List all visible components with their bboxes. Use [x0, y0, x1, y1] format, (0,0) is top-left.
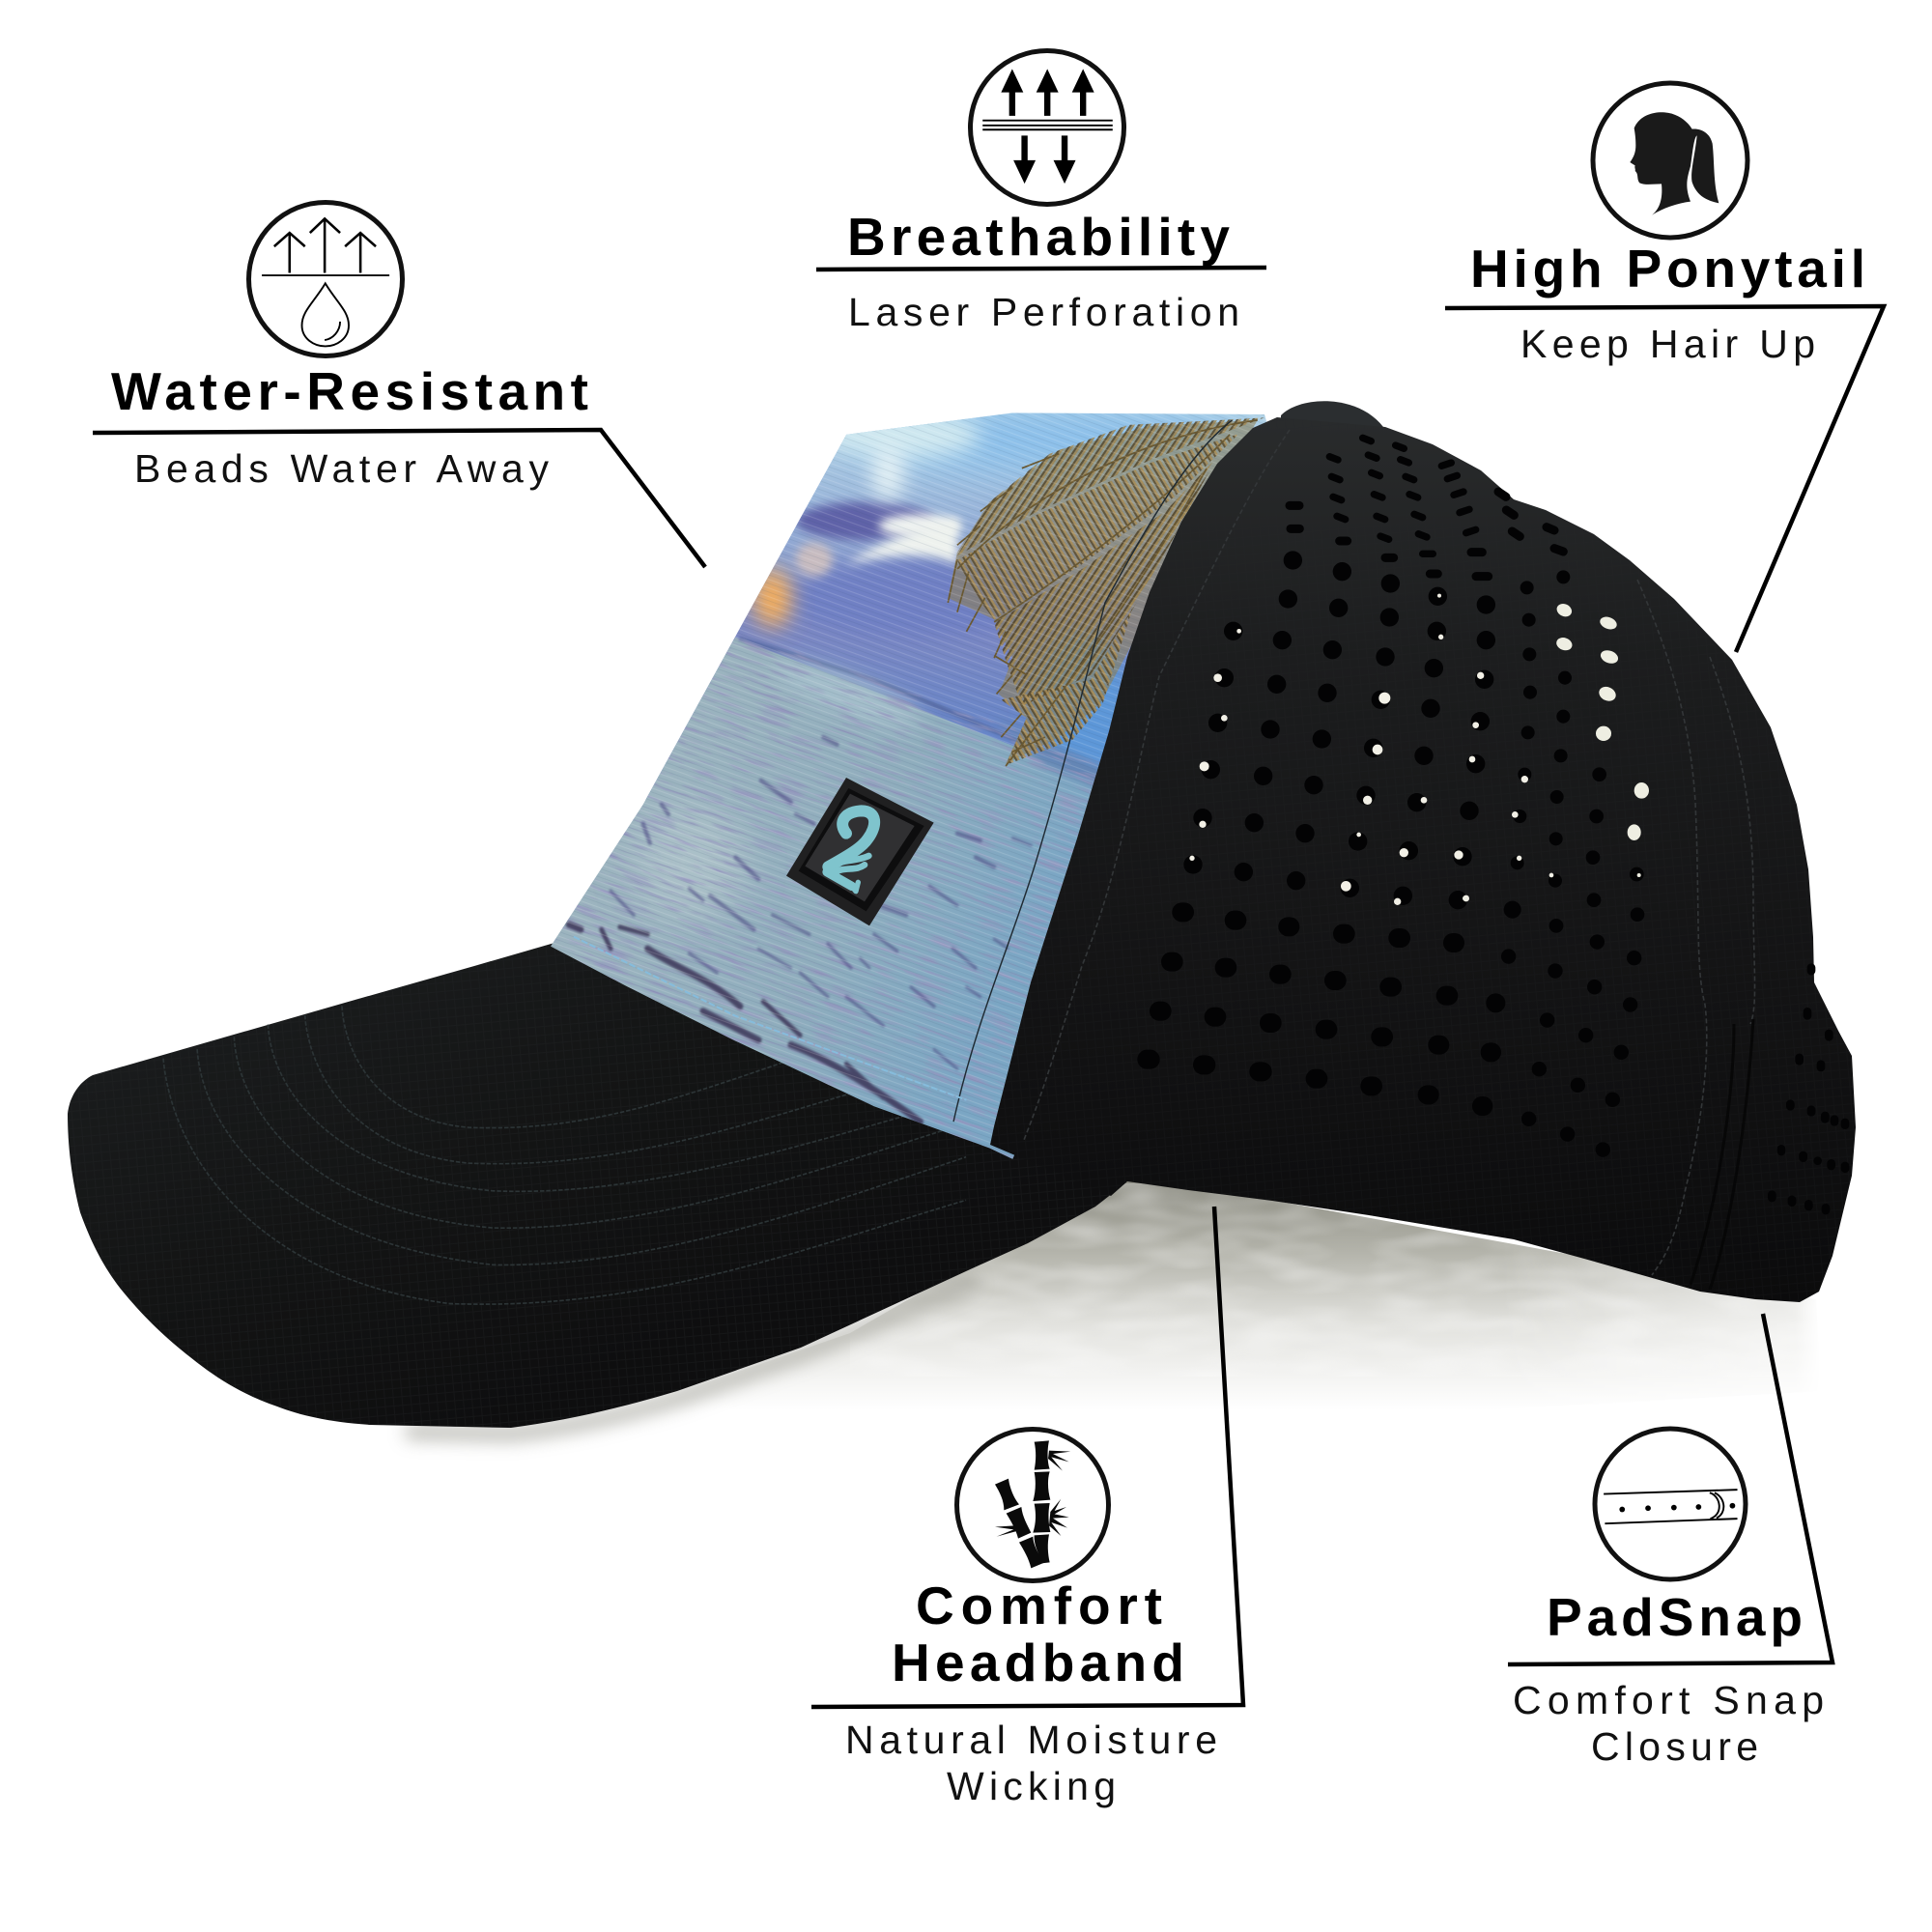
heading: PadSnap [1547, 1587, 1803, 1647]
callout: water-resistant [93, 203, 705, 567]
seam stitching [953, 420, 1232, 1122]
mesh crown panel [990, 417, 1856, 1302]
icon: ponytail silhouette [1593, 83, 1747, 238]
description: Natural Moisture [845, 1718, 1217, 1762]
laser perforations: lower panel [1147, 912, 1495, 1106]
heading: High Ponytail [1470, 239, 1865, 298]
description: Comfort Snap [1513, 1678, 1824, 1722]
water [551, 638, 1094, 1159]
white light spots through perforations [1189, 594, 1553, 905]
icon: bamboo [956, 1430, 1109, 1580]
icon: water drop with arrows [249, 203, 402, 355]
description: Beads Water Away [134, 446, 549, 491]
icon: snap strap [1595, 1429, 1746, 1579]
callout: padsnap: Closure [1591, 1724, 1758, 1769]
water mottling [554, 637, 1099, 1158]
leader line [93, 430, 705, 567]
icon: airflow arrows [970, 50, 1124, 205]
callout: comfort headband: Headband [892, 1633, 1184, 1692]
leader line [1508, 1314, 1833, 1664]
crown seams [1024, 430, 1755, 1275]
visor stitching [163, 1006, 966, 1304]
heading: Breathability [847, 207, 1230, 267]
leader line [816, 268, 1266, 270]
description: Laser Perforation [848, 290, 1239, 334]
ripstop weave texture [546, 406, 1294, 1175]
ground shadow under hat [727, 1181, 1809, 1389]
heading: Water-Resistant [111, 361, 588, 421]
water streaks [611, 737, 1031, 1068]
laser perforations: rear right [1513, 775, 1637, 925]
description: Keep Hair Up [1520, 322, 1815, 366]
callout: comfort headband [811, 1207, 1243, 1808]
callout: breathability [816, 50, 1266, 334]
leader line [1445, 306, 1884, 652]
leader line [811, 1207, 1243, 1707]
callout: comfort headband: Wicking [947, 1764, 1116, 1808]
laser perforations: rear lower [1509, 942, 1845, 1210]
sky [645, 413, 1267, 800]
callout: padsnap [1508, 1314, 1833, 1769]
rubber number 2 badge [786, 778, 934, 925]
palm frond [948, 417, 1264, 766]
visor [68, 869, 1126, 1434]
button on top of crown [1281, 401, 1383, 427]
printed front panel: beach scene [551, 413, 1267, 1159]
callout: high ponytail [1445, 83, 1884, 652]
heading: Comfort [916, 1576, 1162, 1635]
laser perforations: upper panel [1193, 438, 1565, 900]
hat photo illustration [68, 401, 1856, 1439]
blue stitching [574, 937, 966, 1100]
